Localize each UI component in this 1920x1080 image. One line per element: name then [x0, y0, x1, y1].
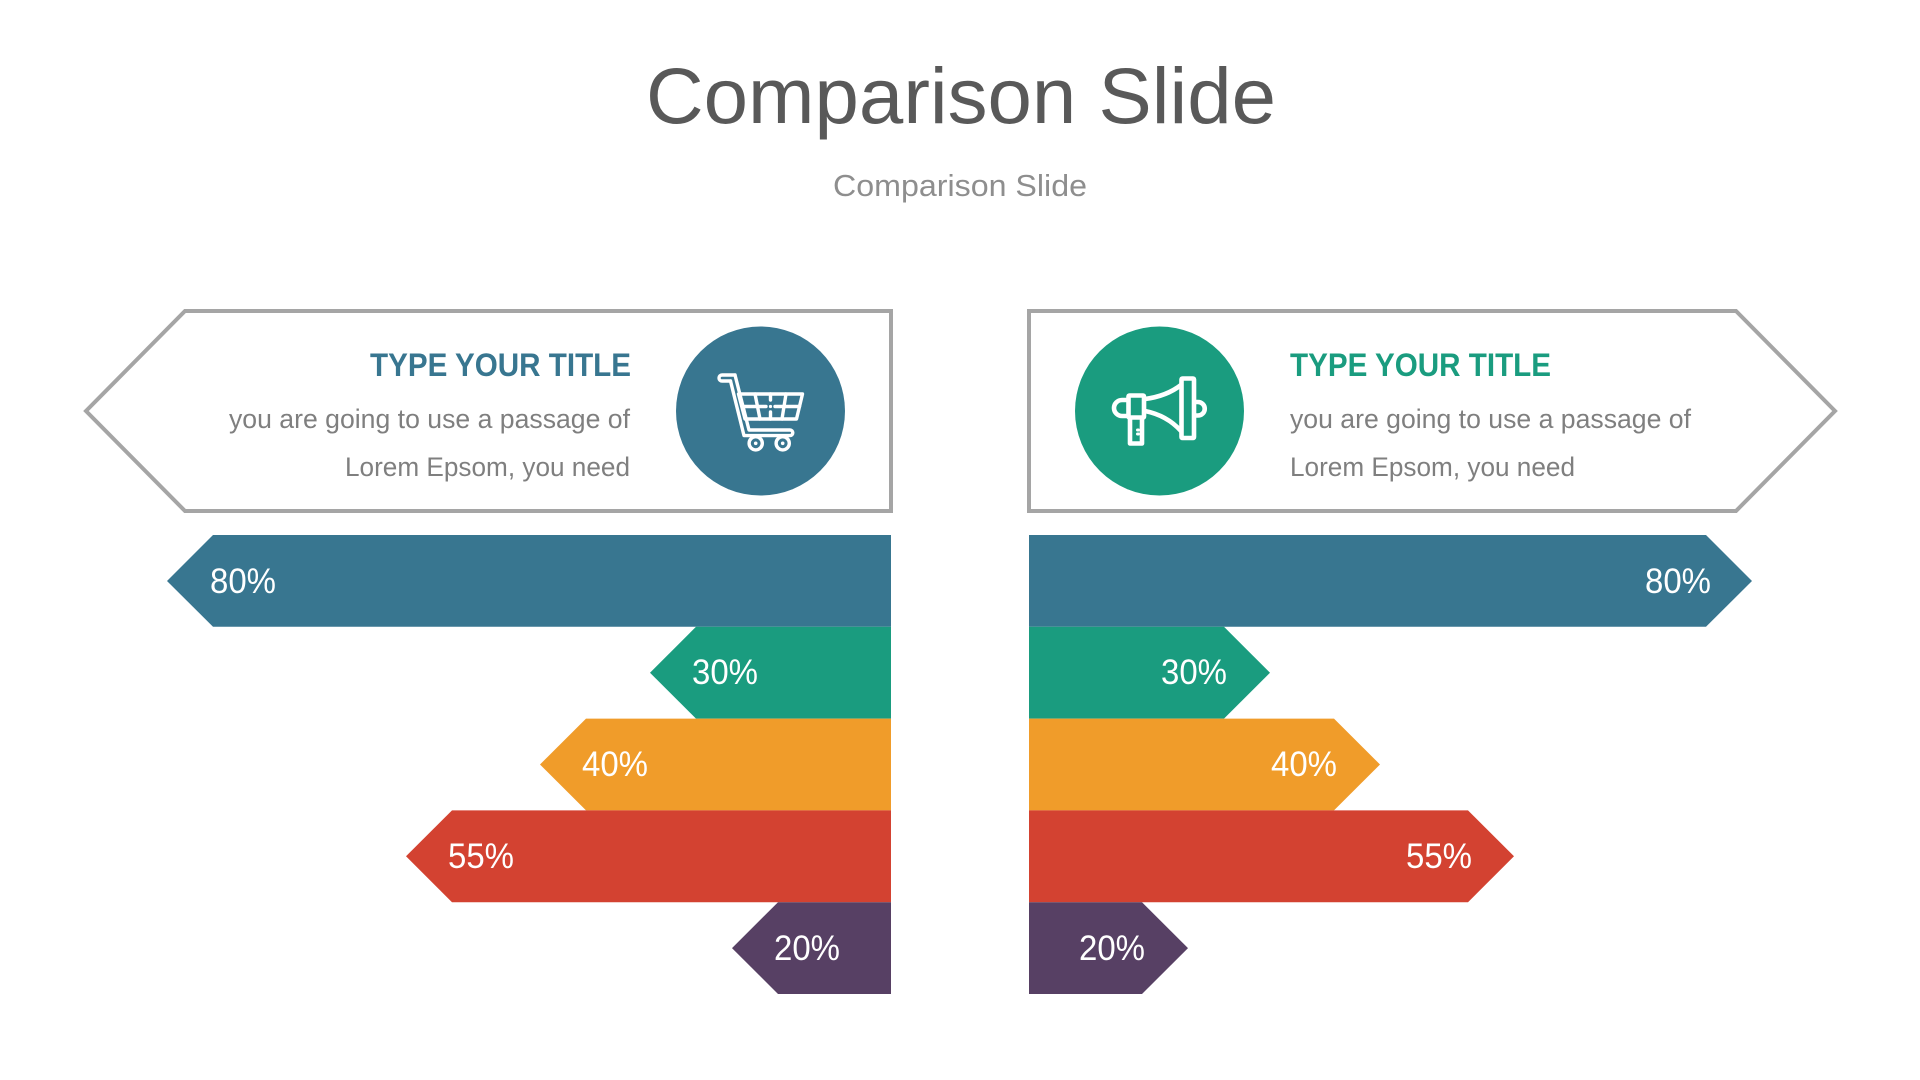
panel: left comparison — [86, 311, 891, 994]
left bar 30% — [650, 627, 891, 719]
right description — [1290, 404, 1691, 482]
right bar 40%: 40% — [1271, 745, 1337, 784]
left bar 20%: 20% — [774, 929, 840, 968]
left bar 80%: 80% — [210, 562, 276, 601]
subtitle: Comparison Slide — [833, 168, 1087, 203]
left bar 20% — [732, 902, 891, 994]
right bar 20% — [1029, 902, 1188, 994]
left bar 80% — [167, 535, 891, 627]
right bar 40% — [1029, 719, 1380, 810]
left description: you are going to use a passage of — [229, 404, 630, 434]
right bar 80% — [1029, 535, 1752, 627]
left bar 55% — [406, 810, 891, 902]
left bar 40%: 40% — [582, 745, 648, 784]
left bar 55%: 55% — [448, 837, 514, 876]
title: Comparison Slide — [646, 51, 1276, 140]
right description: you are going to use a passage of — [1290, 404, 1691, 434]
left description — [229, 404, 630, 482]
left heading: TYPE YOUR TITLE — [370, 347, 631, 383]
left description: Lorem Epsom, you need — [345, 452, 630, 482]
left bar 40% — [540, 719, 891, 810]
left header outline — [86, 311, 891, 511]
right bar 20%: 20% — [1079, 929, 1145, 968]
right header outline — [1029, 311, 1835, 511]
icon: shopping cart — [676, 326, 845, 496]
right bar 80%: 80% — [1645, 562, 1711, 601]
right bar 55%: 55% — [1406, 837, 1472, 876]
right heading: TYPE YOUR TITLE — [1290, 347, 1551, 383]
left bar 30%: 30% — [692, 653, 758, 692]
icon: megaphone — [1075, 326, 1244, 496]
right bar 55% — [1029, 810, 1514, 902]
right bar 30%: 30% — [1161, 653, 1227, 692]
right bar 30% — [1029, 627, 1270, 719]
panel: right comparison — [1029, 311, 1835, 994]
right description: Lorem Epsom, you need — [1290, 452, 1575, 482]
